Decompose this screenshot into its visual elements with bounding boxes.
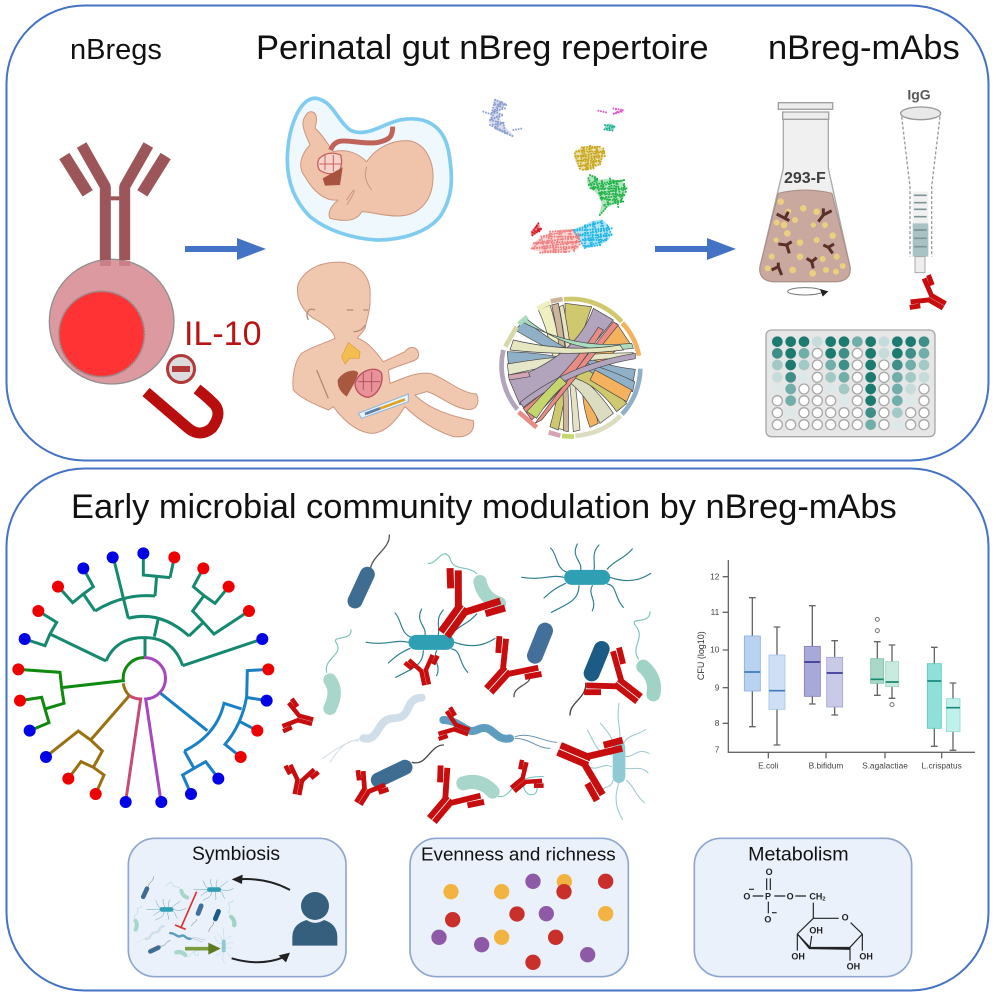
icon: purified antibody <box>908 274 954 322</box>
icon: nBreg cell with antibody receptor <box>49 145 174 384</box>
fetal liver <box>323 167 343 186</box>
panel: bottom <box>6 468 988 990</box>
rotation arrow <box>788 288 828 297</box>
fetus body <box>301 112 433 220</box>
label: 293-F: 293-F <box>784 170 826 187</box>
heading: nBregs: nBregs <box>70 34 162 66</box>
arrow: repertoire to mAbs <box>655 238 736 260</box>
y axis tick labels: 11 <box>711 607 720 617</box>
y axis tick labels: 7 <box>715 744 720 754</box>
x axis labels: L.crispatus <box>922 761 962 771</box>
chemical structure: glucose-6-phosphate: OH <box>859 951 873 961</box>
y axis tick labels <box>710 572 720 754</box>
row 3 <box>772 360 929 370</box>
antibody 9 <box>502 759 545 802</box>
cell body <box>49 259 174 384</box>
clade: blue <box>161 669 268 794</box>
chemical structure: glucose-6-phosphate: O <box>787 891 794 901</box>
group: S.agalactiae <box>871 617 899 707</box>
bacterium: pale hairy vertical <box>587 703 649 819</box>
arrow: microbes to person <box>232 953 290 962</box>
bacterium: slate rod center <box>514 631 545 697</box>
antibody 1 <box>417 566 507 654</box>
heading: Symbiosis: Symbiosis <box>192 844 280 865</box>
row 5 <box>772 384 929 394</box>
bacterium: teal hairy top right <box>522 544 651 612</box>
chemical structure: glucose-6-phosphate: O <box>764 915 771 925</box>
chemical structure: glucose-6-phosphate: 2 <box>822 897 825 903</box>
antibody 8 <box>410 764 486 838</box>
chemical structure: glucose-6-phosphate: O <box>842 913 849 923</box>
row 2 <box>772 348 929 359</box>
heading: Evenness and richness: Evenness and richness <box>421 844 616 865</box>
row 4 <box>772 372 929 383</box>
antibody 11 <box>546 719 625 802</box>
antibody 7 <box>343 768 389 813</box>
culture liquid <box>760 190 850 282</box>
axes <box>723 560 975 758</box>
nucleus <box>59 291 144 377</box>
chemical structure: glucose-6-phosphate: P <box>765 891 771 901</box>
row 8 <box>772 419 929 430</box>
clade: brown <box>46 683 129 794</box>
row 7 <box>772 407 929 418</box>
antibody 2 <box>404 654 443 688</box>
antibody 4 <box>582 646 656 721</box>
surface antibody <box>64 145 166 266</box>
activation arrow <box>185 943 221 955</box>
icon: inhibition minus sign <box>168 356 194 382</box>
dots: orange <box>443 874 613 945</box>
flask glass <box>760 113 850 282</box>
illustration: infant with organs <box>293 262 478 437</box>
heading: nBreg-mAbs: nBreg-mAbs <box>768 29 960 67</box>
bacterium: mint comma left <box>326 630 351 708</box>
label: IgG: IgG <box>907 86 931 102</box>
clade: purple <box>144 658 166 802</box>
bacterium: mint comma bottom <box>463 777 543 797</box>
chemical structure: glucose-6-phosphate: OH <box>847 961 860 971</box>
antibody 5 <box>281 698 317 738</box>
bone marrow <box>358 394 408 418</box>
chemical structure: glucose-6-phosphate <box>743 867 873 971</box>
y axis tick labels: 10 <box>710 644 720 654</box>
clade: green <box>18 658 144 731</box>
y axis tick labels: 12 <box>710 572 720 582</box>
chemical structure: glucose-6-phosphate: OH <box>791 951 805 961</box>
cluster: blue <box>572 220 612 248</box>
column tip <box>915 257 925 273</box>
illustration: microbial community with antibodies <box>280 535 656 838</box>
cluster: yellow <box>574 145 605 170</box>
y axis tick labels: 9 <box>715 682 720 692</box>
row 6 <box>772 395 929 406</box>
y axis title: CFU (log10) <box>696 631 706 680</box>
antibody 10 <box>437 707 475 748</box>
chemical structure: glucose-6-phosphate: CH <box>809 891 822 901</box>
tips: blue <box>19 547 273 808</box>
cells <box>765 198 846 277</box>
antibody 6 <box>280 764 319 798</box>
x axis labels: S.agalactiae <box>862 761 908 771</box>
chemical structure: glucose-6-phosphate: OH <box>809 925 823 935</box>
x axis labels: B.bifidum <box>809 761 843 771</box>
chord outer arcs <box>502 299 640 437</box>
flask cap <box>778 103 833 119</box>
cluster: salmon <box>531 229 580 253</box>
antibody 3 <box>468 634 543 709</box>
heading: early microbial community modulation: Early microbial community modulation by nBreg-mAbs <box>71 488 897 526</box>
row 1 <box>772 336 929 347</box>
inhibition line <box>175 892 197 929</box>
clade: teal <box>25 553 262 666</box>
group: E.coli <box>744 598 785 745</box>
group: B.bifidum <box>804 606 843 715</box>
heading: Metabolism: Metabolism <box>748 844 849 866</box>
icon: IL-10 receptor hook <box>146 389 218 433</box>
bacterium: dark rod right <box>570 649 602 715</box>
cluster: red <box>531 223 542 237</box>
y axis tick labels: 8 <box>715 718 720 728</box>
x axis labels <box>758 761 962 771</box>
bacterium: mint comma top <box>428 554 499 603</box>
illustration: IgG purification column <box>901 86 941 273</box>
thymus <box>342 343 360 364</box>
arrow: person to microbes <box>232 875 290 890</box>
bacterium: mint comma right <box>634 612 654 694</box>
bacterium: pale spiral <box>323 698 422 762</box>
umbilical cord <box>331 127 393 150</box>
chord white disc <box>507 302 636 431</box>
chart: UMAP cluster scatter <box>483 98 627 253</box>
panel: top <box>6 6 988 460</box>
cluster: teal <box>604 124 615 131</box>
tips: red <box>12 551 274 800</box>
liver <box>338 371 358 397</box>
column funnel <box>901 107 941 120</box>
plate body <box>766 330 935 437</box>
infant body <box>293 262 478 437</box>
arrow: nBregs to repertoire <box>185 238 266 260</box>
bacteria <box>323 535 654 819</box>
column matrix bands <box>913 192 928 223</box>
fetal intestine <box>318 153 342 174</box>
chart: circular phylogenetic tree <box>12 547 274 808</box>
panel: symbiosis <box>128 838 346 977</box>
amniotic sac <box>287 98 451 240</box>
cluster: magenta <box>598 108 623 114</box>
bacterium: slate rod top <box>355 535 389 601</box>
illustration: 96-well ELISA plate <box>766 330 935 437</box>
chord ribbons <box>507 303 635 432</box>
group: L.crispatus <box>927 647 960 750</box>
cluster: lilac <box>483 98 523 137</box>
mini bacterial community <box>133 877 234 963</box>
icon: person <box>292 892 337 946</box>
chemical structure: glucose-6-phosphate: O <box>766 867 773 877</box>
bacterium: blue spiral <box>443 720 557 748</box>
illustration: fetus in amniotic sac <box>287 98 451 240</box>
panel: metabolism <box>694 838 912 977</box>
bacterium: slate rod bottom <box>378 745 443 780</box>
cluster: green <box>587 175 627 217</box>
bacterium: teal hairy center <box>366 609 495 677</box>
clade: pink <box>126 696 141 802</box>
chemical structure: glucose-6-phosphate: O <box>743 891 750 901</box>
chart: box plot of CFU <box>696 560 975 771</box>
intestine <box>355 369 382 397</box>
heading: perinatal gut repertoire: Perinatal gut nBreg repertoire <box>256 29 709 67</box>
label: IL-10: IL-10 <box>184 315 262 353</box>
dots: purple <box>431 874 595 962</box>
x axis labels: E.coli <box>758 761 779 771</box>
chart: chord diagram <box>502 299 640 437</box>
panel: evenness and richness <box>410 838 628 977</box>
illustration: 293-F culture flask <box>760 103 850 297</box>
antibodies in flask <box>772 208 834 275</box>
dots: red <box>445 874 613 970</box>
